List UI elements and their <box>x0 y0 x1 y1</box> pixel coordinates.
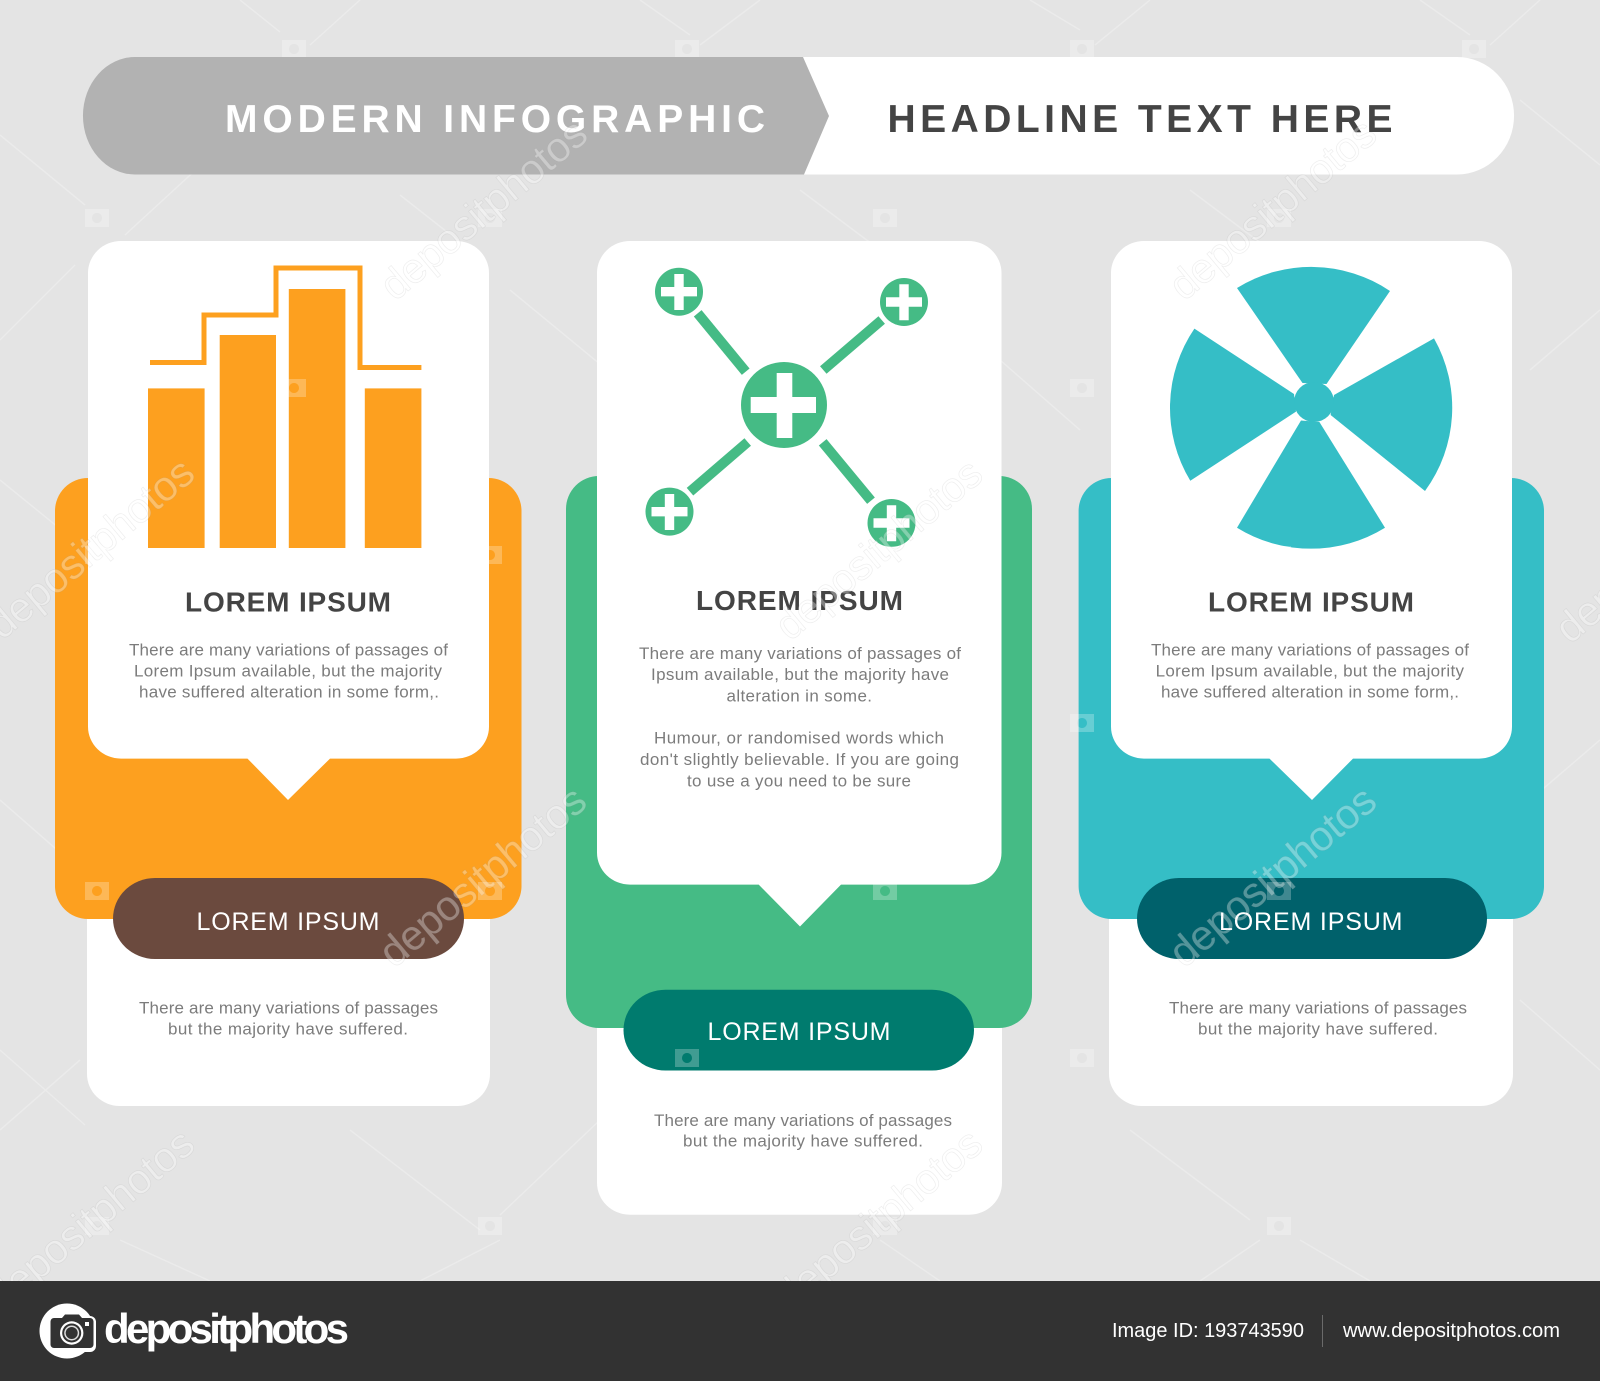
pill label: LOREM IPSUM <box>196 908 380 936</box>
header white segment <box>790 57 1514 174</box>
card body text: There are many variations of passages of <box>1151 640 1469 660</box>
pill button <box>1137 878 1487 959</box>
lower text <box>1169 998 1467 1038</box>
card body text: Humour, or randomised words which <box>654 728 944 748</box>
lower text <box>654 1111 952 1150</box>
lower text <box>139 998 438 1038</box>
stock watermarks: depositphotos <box>1160 109 1385 309</box>
lower text: but the majority have suffered. <box>1198 1020 1438 1038</box>
lower white card <box>597 900 1002 1215</box>
lower text: There are many variations of passages <box>654 1111 952 1130</box>
upper white speech card <box>88 241 489 800</box>
card body text: have suffered alteration in some form,. <box>1161 682 1459 702</box>
card body text: alteration in some. <box>726 686 872 706</box>
stock watermarks: depositphotos <box>766 449 991 649</box>
pill button <box>113 878 464 959</box>
card body text: There are many variations of passages of <box>639 644 961 663</box>
card body text: Ipsum available, but the majority have <box>651 665 949 684</box>
card body text: Lorem Ipsum available, but the majority <box>134 662 442 680</box>
pill label: LOREM IPSUM <box>708 1018 890 1046</box>
panel: orange column <box>55 241 522 1106</box>
lower white card <box>87 800 490 1106</box>
logo wordmark: depositphotos <box>104 1305 349 1352</box>
stock watermarks: depositphotos <box>766 1119 991 1319</box>
pill label: LOREM IPSUM <box>1219 908 1402 936</box>
footer bar <box>0 1281 1600 1381</box>
card body text: There are many variations of passages of <box>129 640 448 660</box>
panel: teal column <box>1079 241 1544 1106</box>
card body text <box>639 644 961 790</box>
lower white card <box>1109 800 1513 1106</box>
upper white speech card <box>597 241 1002 926</box>
pill button <box>624 990 974 1070</box>
lower text: but the majority have suffered. <box>168 1020 408 1038</box>
website url: www.depositphotos.com <box>1342 1320 1560 1342</box>
lower text: There are many variations of passages <box>1169 998 1467 1018</box>
panel: green column <box>566 241 1032 1215</box>
orange block <box>55 478 522 919</box>
upper white speech card <box>1111 241 1512 800</box>
card body text <box>129 640 448 702</box>
icon: radiation fan <box>1170 267 1452 549</box>
stock watermarks: depositphotos <box>1160 776 1385 976</box>
icon: molecule network with plus signs <box>646 268 928 547</box>
green block <box>566 476 1032 1028</box>
icon: bar chart <box>148 268 421 548</box>
card body text: have suffered alteration in some form,. <box>139 682 439 702</box>
stock watermarks: depositphotos <box>371 109 596 309</box>
header banner <box>83 57 1514 174</box>
card title: LOREM IPSUM <box>696 585 903 616</box>
image id: Image ID: 193743590 <box>1112 1320 1304 1342</box>
card title: LOREM IPSUM <box>185 586 391 618</box>
lower text: There are many variations of passages <box>139 998 438 1018</box>
card body text: to use a you need to be sure <box>687 772 911 790</box>
card body text <box>1151 640 1469 702</box>
teal block <box>1079 478 1544 919</box>
card body text: Lorem Ipsum available, but the majority <box>1156 662 1464 680</box>
heading: modern infographic: MODERN INFOGRAPHIC <box>225 98 765 141</box>
heading: headline text: HEADLINE TEXT HERE <box>888 98 1392 141</box>
icon: camera logo <box>40 1304 96 1358</box>
card title: LOREM IPSUM <box>1208 586 1414 618</box>
card body text: don't slightly believable. If you are going <box>640 750 959 769</box>
lower text: but the majority have suffered. <box>683 1132 923 1150</box>
stock watermarks: depositphotos <box>370 776 595 976</box>
header grey arrow segment <box>83 57 829 174</box>
